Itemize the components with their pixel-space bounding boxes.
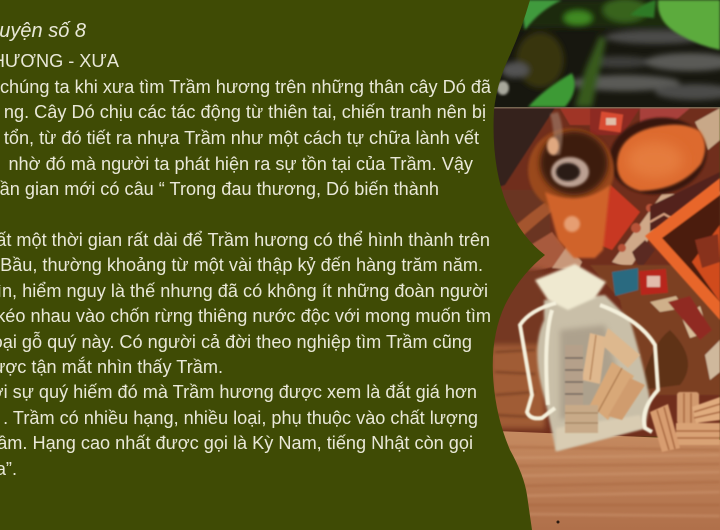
paragraph two: Bầu, thường khoảng từ một vài thập kỷ đến hàng trăm năm.	[0, 255, 483, 275]
ribbon	[520, 303, 658, 432]
incense sticks beside the bag	[650, 392, 720, 452]
paragraph one: ng. Cây Dó chịu các tác động từ thiên tai, chiến tranh nên bị	[4, 102, 486, 122]
paragraph three: rầm. Hạng cao nhất được gọi là Kỳ Nam, tiếng Nhật còn gọi	[0, 433, 473, 453]
paragraph two	[0, 230, 491, 377]
organza bag with incense	[520, 264, 658, 451]
paragraph one: nhờ đó mà người ta phát hiện ra sự tồn tại của Trầm. Vậy	[8, 154, 474, 174]
paragraph one	[0, 77, 492, 199]
left brown wood cushion	[490, 265, 545, 430]
text block: article	[0, 20, 492, 479]
paragraph three	[0, 381, 478, 479]
photo: incense, glass, bowl and bag on patterned carpet	[480, 107, 720, 530]
photo: plant and dark stones	[480, 0, 720, 107]
paragraph two: ất một thời gian rất dài để Trầm hương có thể hình thành trên	[0, 230, 490, 250]
amber glass with candle	[528, 112, 614, 258]
orange box	[645, 178, 720, 320]
carpet background	[480, 107, 720, 437]
paragraph one: chúng ta khi xưa tìm Trầm hương trên những thân cây Dó đã	[0, 77, 492, 97]
paragraph three: ới sự quý hiếm đó mà Trầm hương được xem là đắt giá hơn	[0, 381, 477, 402]
paragraph one: tổn, từ đó tiết ra nhựa Trầm như một cách tự chữa lành vết	[4, 128, 479, 148]
carpet lower patch	[590, 265, 720, 395]
paragraph three: . Trầm có nhiều hạng, nhiều loại, phụ thuộc vào chất lượng	[3, 408, 478, 428]
paragraph two: loại gỗ quý này. Có người cả đời theo nghiệp tìm Trầm cũng	[0, 331, 472, 352]
paragraph one: ần gian mới có câu “ Trong đau thương, Dó biến thành	[0, 179, 439, 199]
green text panel with curved edge	[0, 0, 545, 530]
paragraph two: ìn, hiểm nguy là thế nhưng đã có không ít những đoàn người	[0, 281, 488, 301]
carved bowl of powder	[610, 116, 708, 196]
wooden table	[480, 431, 720, 530]
paragraph two: kéo nhau vào chốn rừng thiêng nước độc với mong muốn tìm	[0, 306, 491, 326]
